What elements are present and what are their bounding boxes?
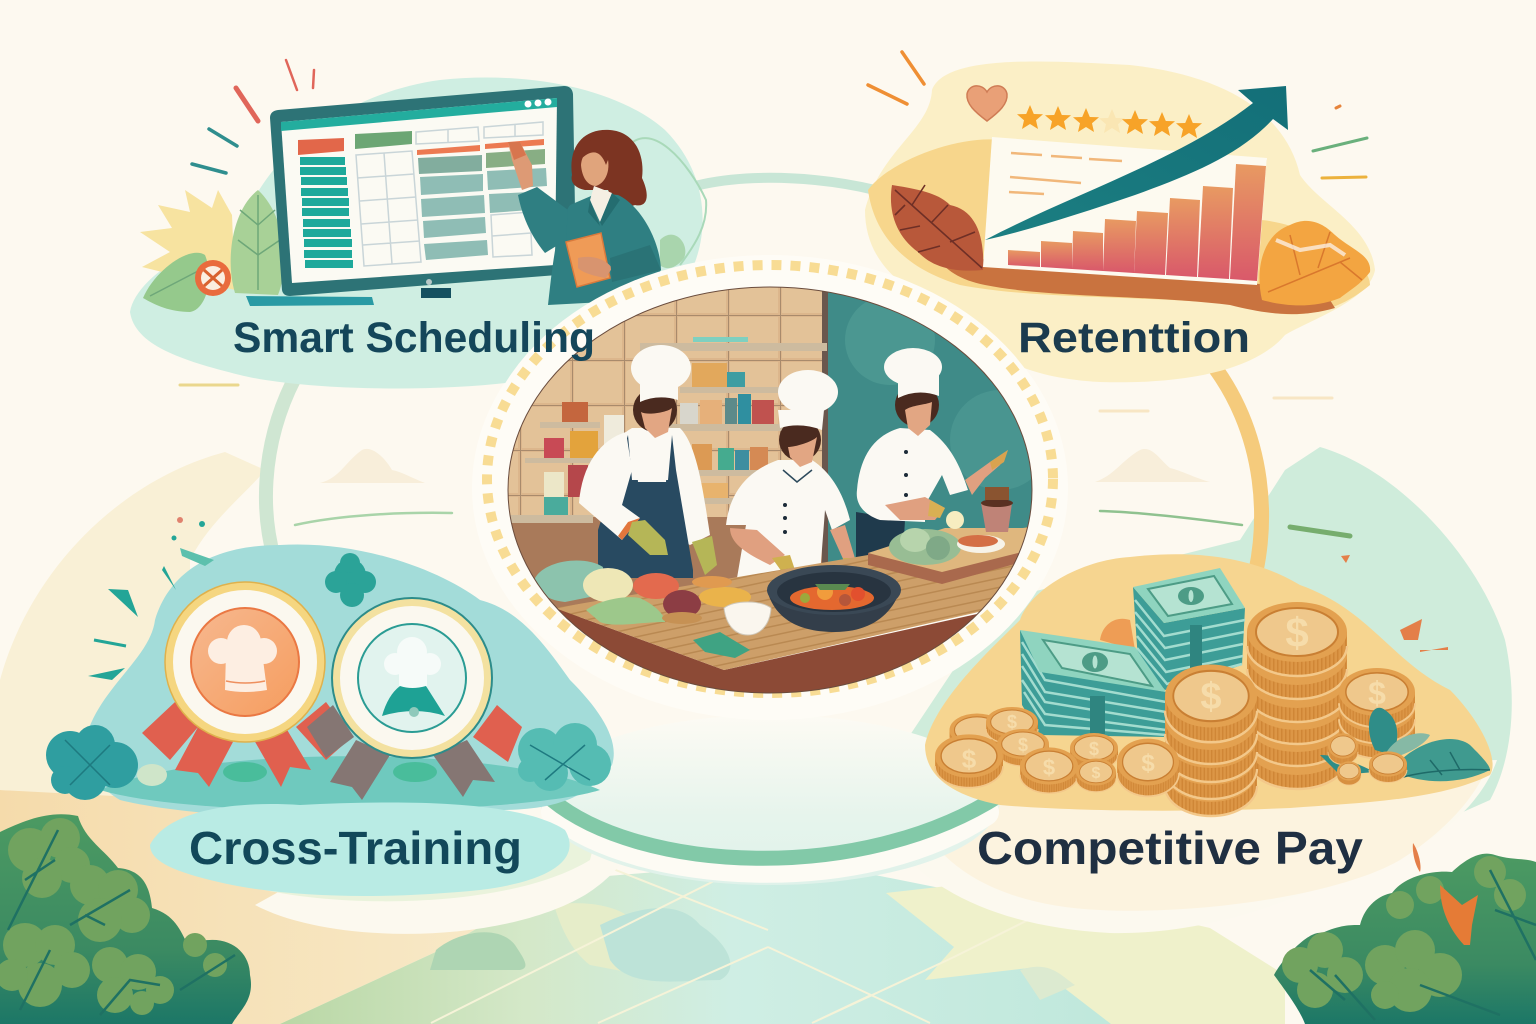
- tall coin stack: $: [1285, 609, 1309, 656]
- loose coins: $: [1007, 712, 1017, 732]
- loose coins: $: [1141, 750, 1155, 777]
- wok with stew: [767, 565, 901, 632]
- loose coins: $: [1018, 735, 1028, 755]
- darker dapple: [100, 756, 600, 811]
- brown leaf: [891, 185, 983, 271]
- white bowl: [724, 602, 771, 635]
- orange leaf: [1259, 221, 1370, 305]
- rating stars: [1017, 105, 1202, 138]
- spark lines: [868, 52, 1367, 178]
- connecting ring arcs: [180, 178, 1350, 869]
- staff column: [300, 157, 353, 268]
- label blob: [150, 803, 570, 896]
- label: competitive pay: Competitive Pay: [977, 822, 1363, 874]
- brown shadow: [935, 255, 1335, 314]
- retention blob: [865, 61, 1375, 382]
- central kitchen scene: [508, 288, 1032, 692]
- ribbons: [142, 702, 522, 800]
- band under cross-training label: [230, 820, 600, 901]
- large pale circle right: [880, 447, 1512, 840]
- report text lines: [1009, 153, 1122, 194]
- spark lines: [192, 60, 314, 173]
- halo around dashed ring: [477, 255, 1063, 703]
- panel: competitive pay: [925, 554, 1493, 872]
- heart icon: [967, 86, 1007, 121]
- middle coin stack: [1165, 664, 1257, 816]
- counter base: [559, 610, 977, 692]
- label: retention: Retenttion: [1018, 314, 1250, 362]
- cash stack back: [1133, 568, 1245, 690]
- confetti: [1341, 555, 1448, 872]
- teal wall: [828, 292, 1032, 562]
- landscape: bottom map and hills: [0, 790, 1285, 1024]
- chef three: [856, 348, 1008, 560]
- white band under cross-training: [255, 790, 650, 934]
- loose coins: $: [1092, 765, 1101, 782]
- chopped greens: [693, 632, 750, 658]
- spark marks: [88, 517, 214, 680]
- money sand blob: [925, 554, 1493, 811]
- central halo: [472, 256, 1068, 720]
- label: smart scheduling: Smart Scheduling: [233, 314, 595, 362]
- cream zone under competitive pay: [905, 765, 1488, 911]
- tall coin stack: [1247, 602, 1347, 789]
- central dashed ring: [487, 265, 1053, 693]
- counter top: [555, 525, 1040, 670]
- pale mint under scene: [540, 715, 1000, 885]
- loose coins: $: [1043, 755, 1055, 780]
- chef two: [726, 370, 860, 578]
- monitor with schedule: [246, 86, 576, 306]
- panel: retention: [865, 52, 1375, 382]
- medal: orange chef hat: [165, 582, 325, 742]
- loose coins: [935, 707, 1179, 796]
- corner bush left: [0, 814, 251, 1024]
- panel: cross-training: [46, 517, 614, 896]
- middle coin stack: $: [1200, 676, 1222, 718]
- loose coins: $: [962, 744, 977, 774]
- corner bush right: [1274, 854, 1536, 1024]
- cash stack front: [1020, 630, 1166, 737]
- right coin stack: $: [1368, 675, 1386, 711]
- label: cross-training: Cross-Training: [189, 822, 522, 874]
- chef one: [579, 345, 717, 578]
- shelves and books: [508, 337, 827, 523]
- scene outline: [508, 287, 1032, 693]
- bar chart: [1008, 164, 1266, 281]
- distant clouds: [320, 449, 1210, 483]
- kitchen wall: [508, 288, 822, 517]
- orange patch: [1100, 619, 1135, 650]
- shift grid: [356, 122, 543, 266]
- plants left: [140, 190, 284, 312]
- large pale circle left: [0, 452, 265, 800]
- teal leaves and small coins: [1320, 708, 1490, 785]
- cutting board with cabbage: [868, 487, 1030, 584]
- training blob: [84, 544, 614, 819]
- scheduling blob: [130, 77, 703, 389]
- herb cluster top: [325, 553, 376, 607]
- growth arrow: [985, 86, 1288, 240]
- medal: teal chef hat: [332, 598, 492, 758]
- loose coins: $: [1089, 739, 1099, 759]
- panel: smart scheduling: [130, 60, 706, 389]
- woman presenter: [508, 130, 706, 305]
- report sheet: [983, 137, 1267, 285]
- white band under competitive pay: [868, 760, 1497, 933]
- vegetables left: [535, 560, 751, 625]
- orange sand: [868, 139, 1370, 314]
- herb bushes: [46, 723, 611, 800]
- right coin stack: [1339, 668, 1415, 758]
